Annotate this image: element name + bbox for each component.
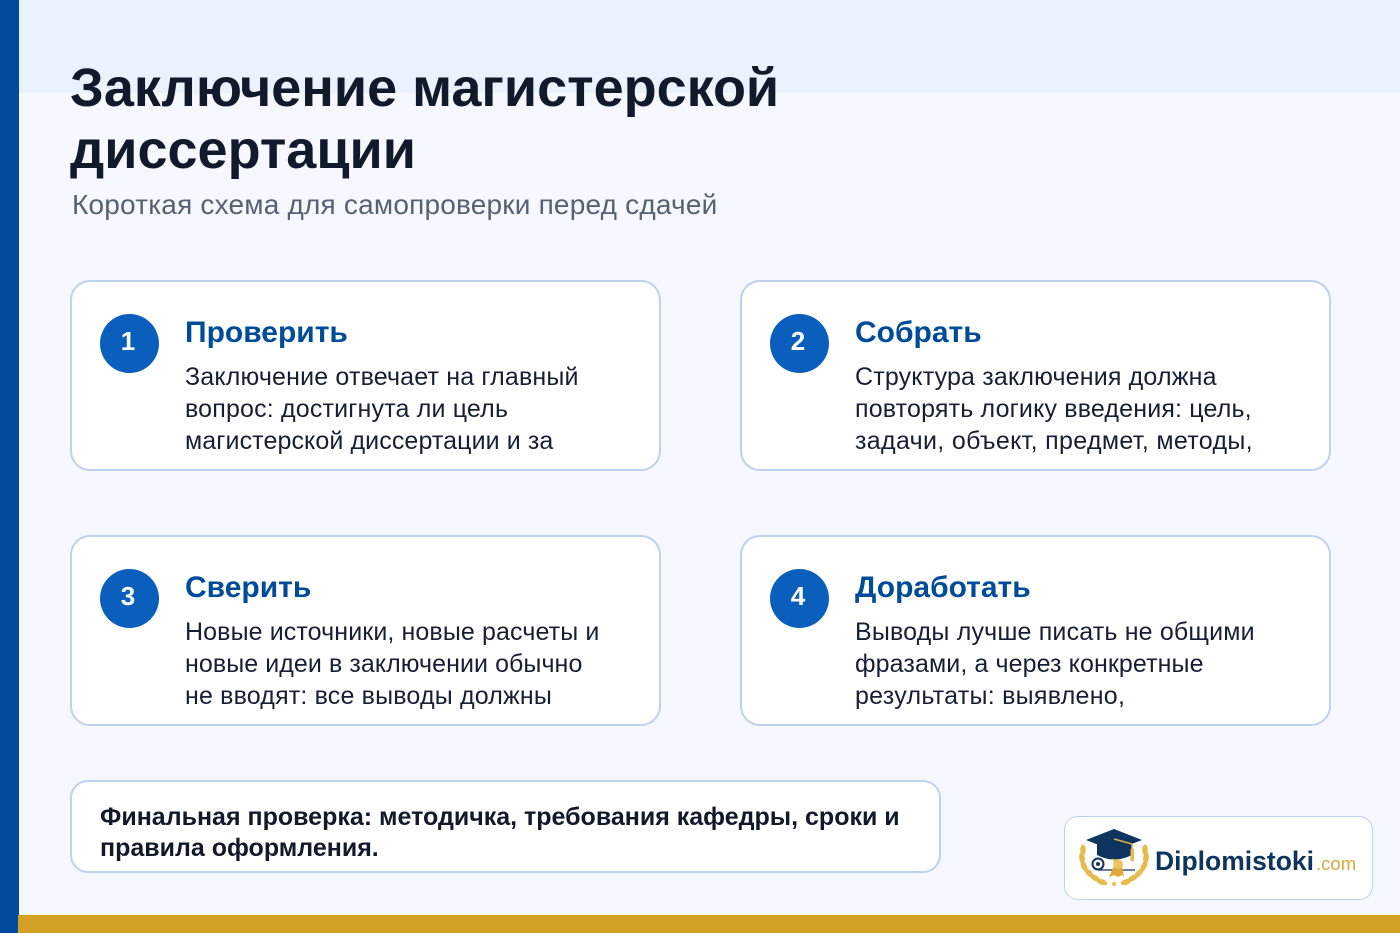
text: step 4: фразами, а через конкретные	[855, 650, 1204, 678]
step number 2	[770, 314, 829, 373]
text: step 1	[185, 363, 579, 455]
text: step 3: новые идеи в заключении обычно	[185, 650, 582, 678]
text: step 3	[185, 618, 599, 710]
title: диссертации	[70, 120, 416, 180]
panel: step 3	[70, 535, 661, 726]
text: step 1: вопрос: достигнута ли цель	[185, 395, 508, 423]
callout text: Финальная проверка: методичка, требования кафедры, сроки и	[100, 803, 900, 831]
callout text	[100, 803, 900, 862]
step number 2: 2	[791, 326, 805, 356]
heading: Сверить: Сверить	[185, 571, 311, 604]
callout: final check	[70, 780, 941, 873]
text: step 4: результаты: выявлено,	[855, 682, 1125, 710]
left accent bar	[0, 0, 19, 933]
top header band	[18, 0, 1400, 93]
text: step 1: Заключение отвечает на главный	[185, 363, 579, 391]
panel: step 4	[740, 535, 1331, 726]
text: step 1: магистерской диссертации и за	[185, 427, 553, 455]
text: step 3: не вводят: все выводы должны	[185, 682, 552, 710]
text: step 4: Выводы лучше писать не общими	[855, 618, 1255, 646]
heading: Доработать: Доработать	[855, 571, 1031, 604]
subtitle: Короткая схема для самопроверки перед сдачей	[72, 189, 717, 220]
heading: Собрать: Собрать	[855, 316, 982, 349]
text: step 2: Структура заключения должна	[855, 363, 1217, 391]
text: step 3: Новые источники, новые расчеты и	[185, 618, 599, 646]
callout text: правила оформления.	[100, 834, 379, 862]
panel: step 2	[740, 280, 1331, 471]
logo wordmark: Diplomistoki.com	[1155, 846, 1356, 876]
text: step 2	[855, 363, 1253, 455]
panel: step 1	[70, 280, 661, 471]
step number 3: 3	[121, 581, 135, 611]
logo panel	[1064, 816, 1373, 900]
step number 1: 1	[121, 326, 135, 356]
title: Заключение магистерской	[70, 58, 779, 118]
step number 3	[100, 569, 159, 628]
step number 4: 4	[791, 581, 805, 611]
step number 1	[100, 314, 159, 373]
heading: Проверить: Проверить	[185, 316, 348, 349]
title	[70, 58, 779, 180]
text: step 2: задачи, объект, предмет, методы,	[855, 427, 1253, 455]
text: step 4	[855, 618, 1255, 710]
step number 4	[770, 569, 829, 628]
bottom gold bar	[18, 915, 1400, 933]
text: step 2: повторять логику введения: цель,	[855, 395, 1252, 423]
logo icon: graduation cap and laurels	[1079, 829, 1149, 886]
